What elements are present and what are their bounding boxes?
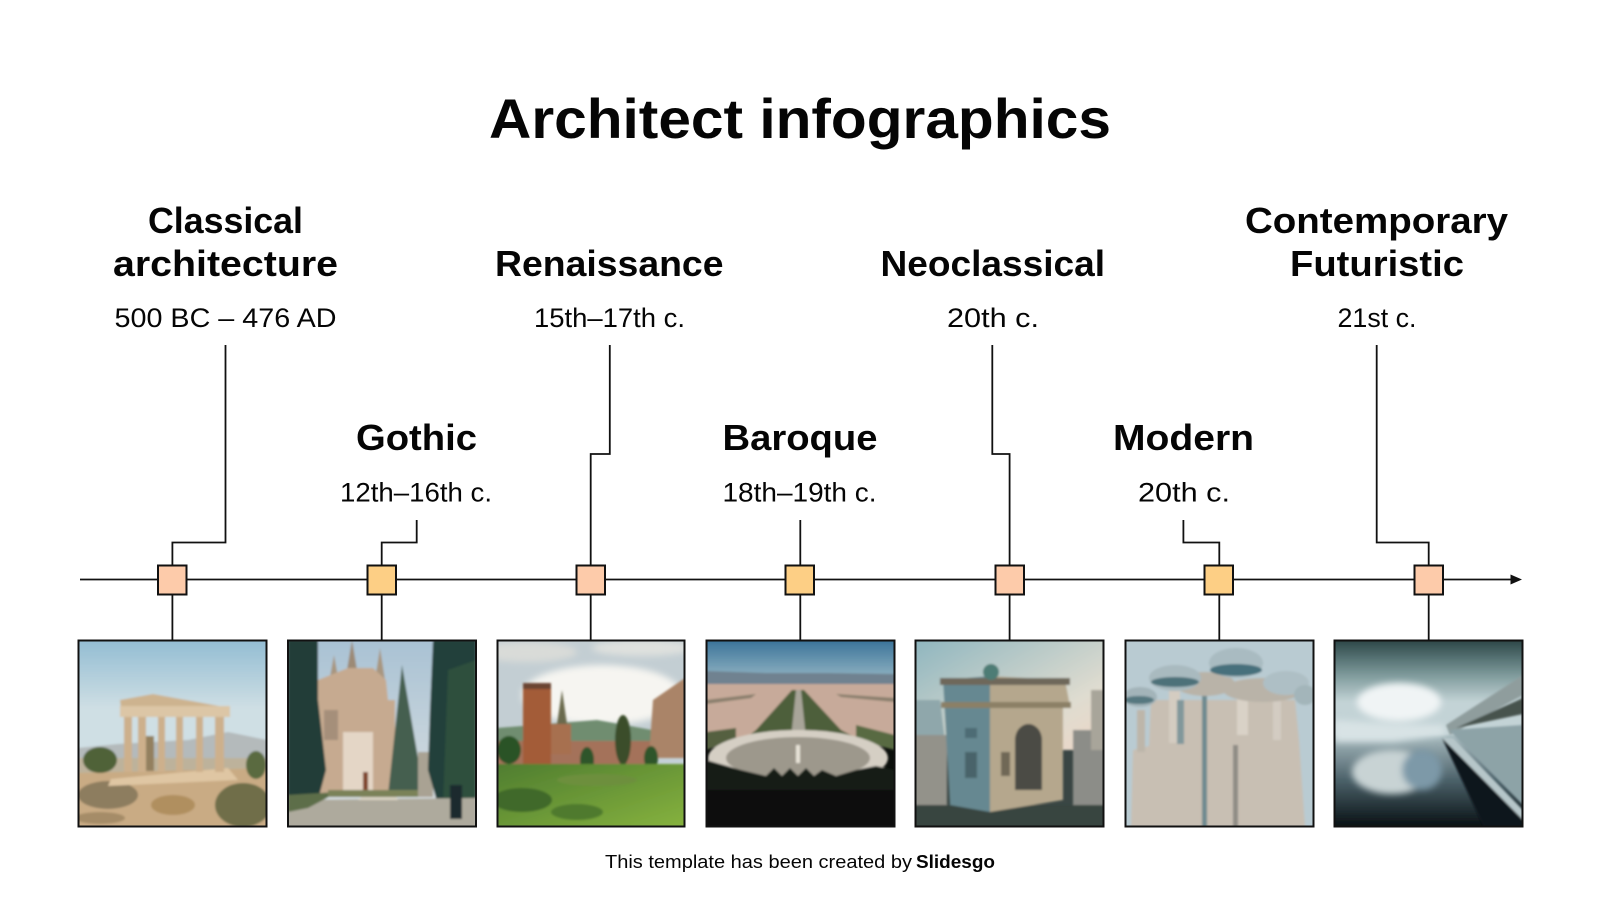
timeline axis with arrow — [80, 574, 1522, 584]
label: Gothic — [340, 417, 492, 508]
label: Neoclassical — [880, 243, 1105, 333]
title: Architect infographics — [489, 87, 1111, 150]
label: Contemporary Futuristic: 21st c. — [1338, 303, 1416, 333]
label: Gothic: 12th–16th c. — [340, 478, 492, 508]
label: Modern — [1113, 417, 1254, 508]
label: Modern: Modern — [1113, 417, 1254, 458]
label: Baroque: 18th–19th c. — [722, 478, 876, 508]
label: Renaissance: Renaissance — [495, 243, 724, 284]
label: Contemporary Futuristic — [1245, 200, 1508, 333]
label: Classical architecture: Classical — [148, 200, 303, 241]
label: Neoclassical: 20th c. — [947, 303, 1039, 333]
label: Renaissance — [495, 243, 724, 333]
photo: futuristic interior — [1336, 642, 1522, 826]
label: Neoclassical: Neoclassical — [880, 243, 1105, 284]
photo: neoclassical arch — [916, 642, 1102, 826]
label: Gothic: Gothic — [356, 417, 477, 458]
label: Modern: 20th c. — [1138, 478, 1230, 508]
photo: renaissance church — [498, 642, 684, 826]
label: Renaissance: 15th–17th c. — [534, 303, 685, 333]
photo: classical temple — [80, 642, 266, 826]
label: Contemporary Futuristic: Contemporary — [1245, 200, 1508, 241]
photo: modern tower — [1126, 642, 1312, 826]
photo: gothic cathedral — [289, 642, 475, 826]
footer credit: This template has been created by — [605, 852, 912, 872]
label: Contemporary Futuristic: Futuristic — [1290, 243, 1464, 284]
label: Baroque — [722, 417, 878, 508]
label: Baroque: Baroque — [722, 417, 878, 458]
label: Classical architecture: 500 BC – 476 AD — [114, 303, 336, 333]
timeline markers — [158, 566, 1443, 594]
photo frames — [78, 640, 1522, 826]
photo: baroque piazza — [708, 642, 894, 826]
label: Classical architecture: architecture — [113, 243, 338, 284]
label: Classical architecture — [113, 200, 338, 333]
footer credit: Slidesgo — [916, 852, 995, 872]
connector lines — [172, 345, 1429, 640]
